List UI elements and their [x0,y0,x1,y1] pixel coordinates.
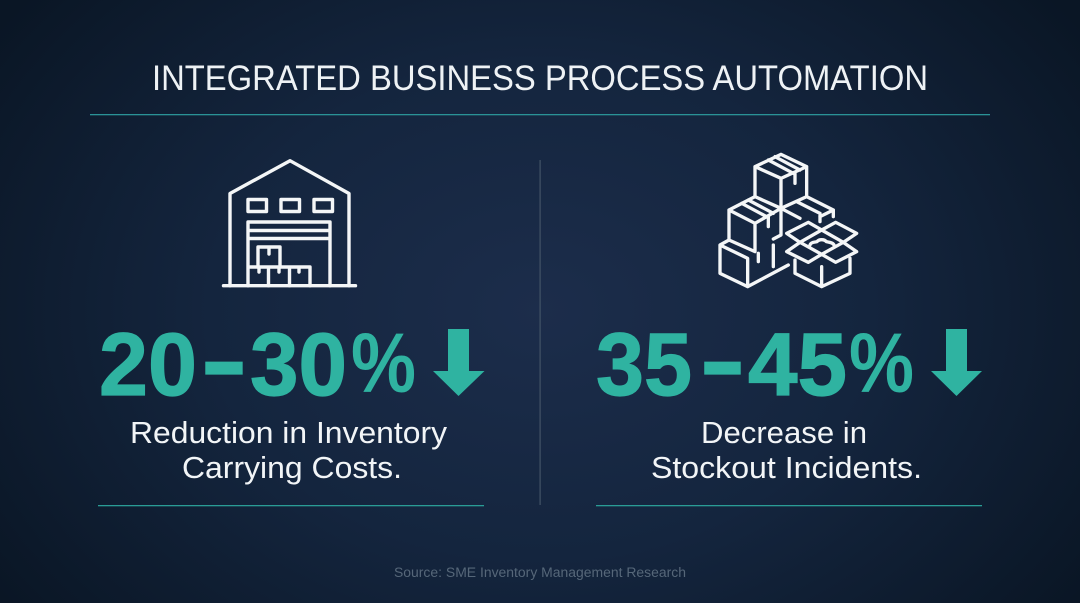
description: Reduction in Inventory [130,416,448,450]
icon: down arrow [433,329,484,396]
statistic: 20–30%: % [351,316,416,410]
statistic: 35–45%: 45 [748,314,847,414]
panel: stockout incidents [596,154,982,506]
description: Carrying Costs. [182,451,402,485]
statistic: 20–30%: 20 [99,314,197,414]
statistic: 35–45%: 35 [596,314,692,414]
statistic: 20–30% [99,285,416,431]
statistic: 35–45%: % [849,316,914,410]
description: Decrease in [701,416,867,450]
statistic: 20–30%: 30 [250,314,347,414]
icon: down arrow [931,329,982,396]
description [130,416,448,485]
icon: stacked boxes [720,154,857,287]
title: INTEGRATED BUSINESS PROCESS AUTOMATION [152,58,928,98]
description [651,416,922,485]
statistic: 35–45% [596,285,914,431]
statistic: 35–45%: – [702,285,743,431]
source note: Source: SME Inventory Management Research [394,565,686,580]
panel: inventory carrying costs [98,161,484,506]
description: Stockout Incidents. [651,451,922,485]
icon: warehouse [224,161,356,286]
statistic: 20–30%: – [203,285,245,431]
